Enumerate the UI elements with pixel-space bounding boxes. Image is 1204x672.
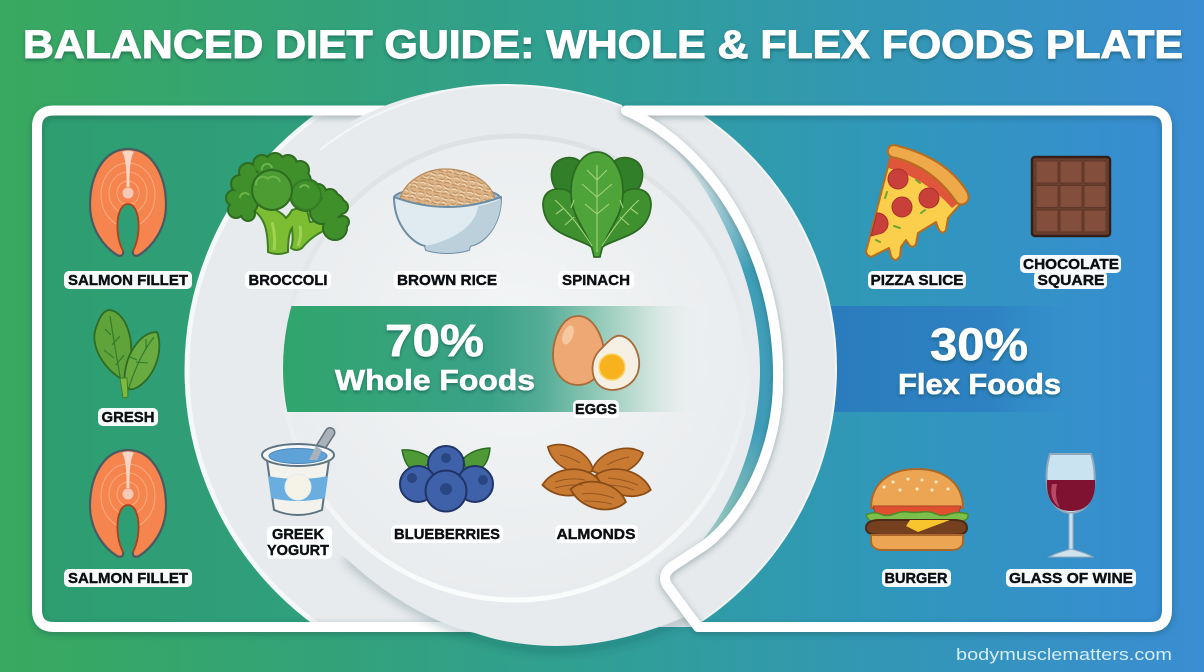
icon: almonds — [541, 438, 654, 513]
panel fill — [37, 110, 1167, 627]
stat: 30 percent flex foods — [898, 319, 1061, 401]
label: salmon fillet: SALMON FILLET — [68, 272, 188, 289]
stat: 70 percent whole foods — [335, 315, 535, 397]
icon: eggs — [553, 316, 639, 390]
label: broccoli: BROCCOLI — [248, 272, 328, 289]
label: chocolate square — [1020, 255, 1121, 289]
banner: whole foods — [275, 306, 700, 412]
plate: inner well — [283, 136, 747, 600]
icon: brown rice bowl — [394, 169, 501, 253]
label: burger: BURGER — [884, 570, 948, 587]
icon: blueberries — [400, 446, 493, 512]
stat: 30 percent flex foods: Flex Foods — [898, 369, 1061, 401]
stat: 70 percent whole foods: 70% — [385, 315, 484, 366]
icon: chocolate square — [1032, 157, 1110, 236]
label: brown rice: BROWN RICE — [397, 272, 497, 289]
label: blueberries: BLUEBERRIES — [394, 526, 500, 543]
label: greek yogurt: GREEK — [272, 526, 324, 543]
label: greek yogurt — [267, 526, 332, 559]
label: spinach: SPINACH — [562, 272, 630, 289]
plate: lower shadow — [346, 558, 689, 649]
plate: right crescent — [675, 116, 837, 627]
icon: salmon fillet top — [90, 149, 166, 256]
stat: 30 percent flex foods: 30% — [930, 319, 1028, 370]
plate: top rim highlight — [320, 85, 622, 150]
stat: 70 percent whole foods: Whole Foods — [335, 365, 535, 397]
label: greek yogurt: YOGURT — [267, 542, 329, 559]
label: pizza slice: PIZZA SLICE — [870, 272, 964, 289]
plate: back disc — [184, 116, 442, 622]
plate gap: teal band — [626, 110, 778, 568]
icon: spinach bunch — [543, 152, 651, 257]
icon: greens — [94, 310, 159, 398]
icon: burger — [866, 469, 968, 550]
icon: greek yogurt — [262, 428, 335, 515]
label: eggs: EGGS — [575, 401, 617, 418]
title: BALANCED DIET GUIDE: WHOLE & FLEX FOODS PLATE — [23, 23, 1183, 67]
label: glass of wine: GLASS OF WINE — [1009, 570, 1133, 587]
icon: broccoli — [227, 154, 348, 254]
frame: left section — [37, 110, 470, 627]
watermark: bodymusclematters.com — [956, 645, 1172, 664]
label: almonds: ALMONDS — [556, 526, 636, 543]
label: chocolate square: SQUARE — [1038, 272, 1104, 289]
icon: glass of wine — [1047, 454, 1095, 557]
icon: salmon fillet bottom — [90, 450, 166, 557]
banner: flex foods — [820, 306, 1095, 412]
frame: right section — [626, 110, 1167, 627]
label: salmon fillet lower: SALMON FILLET — [68, 570, 188, 587]
label: chocolate square: CHOCOLATE — [1023, 256, 1119, 273]
icon: pizza slice — [866, 145, 969, 260]
plate: front disc — [232, 85, 760, 646]
label: gresh: GRESH — [102, 409, 154, 426]
